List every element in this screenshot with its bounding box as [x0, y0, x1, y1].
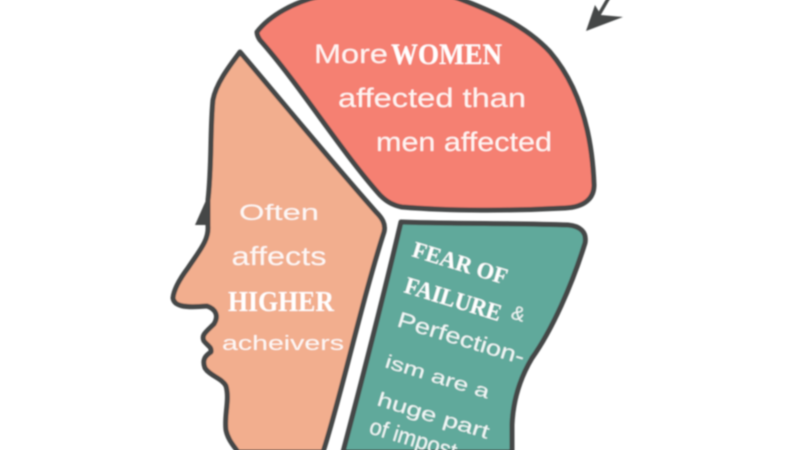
panel: women affected	[257, 0, 594, 210]
text: more women affected than men affected: men affected	[376, 127, 552, 157]
text: more women affected than men affected: More	[314, 39, 388, 69]
panel: fear of failure	[343, 222, 585, 450]
text: fear of failure and perfectionism: Perfection-	[395, 307, 528, 369]
arrow	[586, 0, 623, 31]
text: fear of failure and perfectionism: &	[509, 302, 528, 327]
text: fear of failure and perfectionism	[367, 237, 528, 450]
text: often affects higher achievers	[222, 200, 344, 355]
text: fear of failure and perfectionism: huge part	[375, 389, 492, 444]
text: often affects higher achievers: acheivers	[222, 333, 344, 355]
text: fear of failure and perfectionism: FEAR OF	[410, 237, 511, 289]
icon: hair notch	[195, 198, 209, 225]
text: more women affected than men affected: affected than	[338, 83, 526, 113]
text: more women affected than men affected	[314, 38, 552, 157]
text: fear of failure and perfectionism: ism are a	[383, 352, 493, 404]
text: more women affected than men affected: WOMEN	[391, 38, 502, 71]
text: fear of failure and perfectionism: FAILURE	[401, 273, 504, 327]
text: often affects higher achievers: HIGHER	[228, 286, 335, 318]
panel: face profile	[173, 52, 385, 450]
text: often affects higher achievers: affects	[232, 241, 326, 271]
text: often affects higher achievers: Often	[239, 200, 319, 225]
